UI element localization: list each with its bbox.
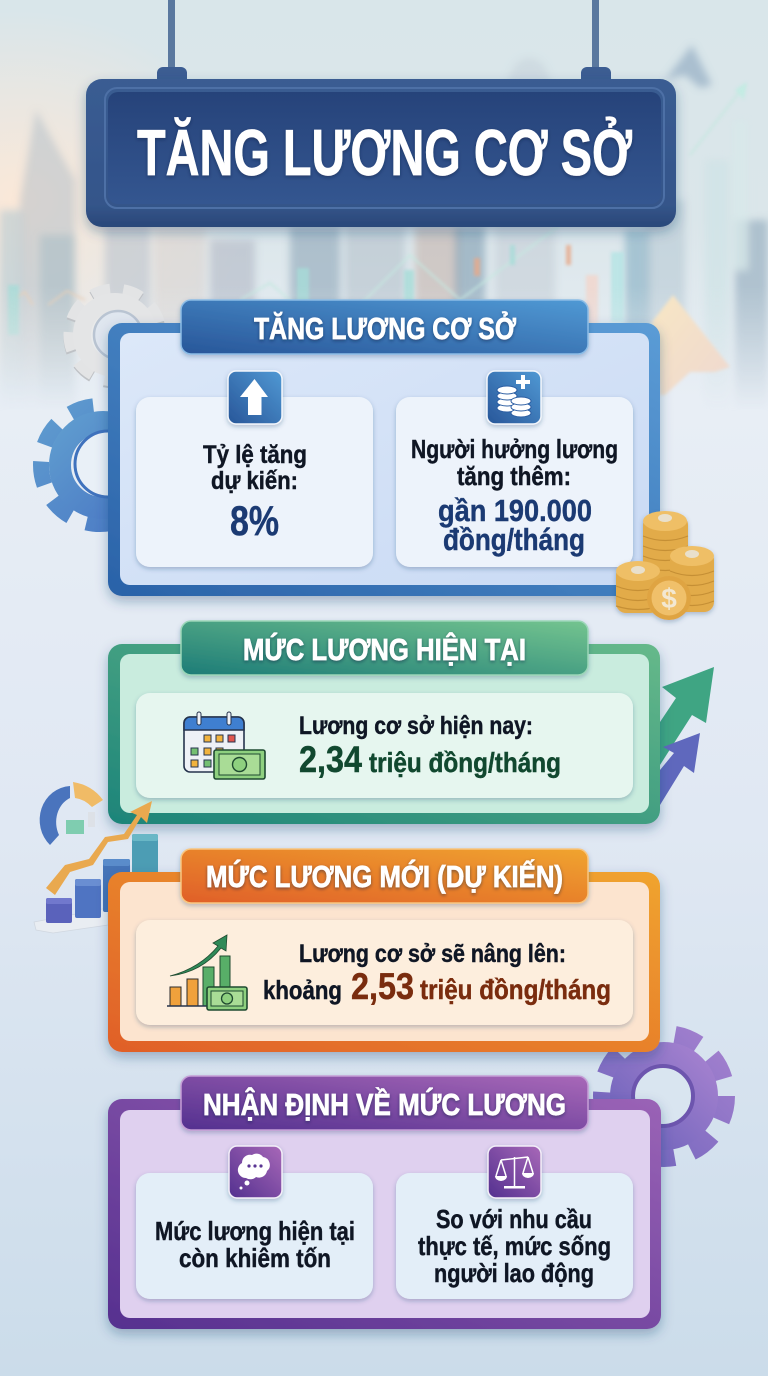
card: 2,34 — [299, 739, 362, 780]
card — [136, 693, 633, 798]
arrows: growth — [660, 667, 714, 805]
card: needs comparison: So với nhu cầu — [436, 1204, 592, 1234]
card: rate — [136, 397, 373, 567]
panel: assessment — [108, 1076, 661, 1329]
heading: MỨC LƯƠNG MỚI (DỰ KIẾN) — [206, 858, 563, 894]
heading: TĂNG LƯƠNG CƠ SỞ — [254, 310, 516, 346]
card: modest salary: Mức lương hiện tại — [155, 1216, 355, 1246]
card: Lương cơ sở hiện nay: — [299, 712, 533, 740]
heading — [181, 1076, 588, 1130]
card: rate: 8% — [230, 497, 279, 544]
gear: grey — [71, 291, 159, 381]
icon: scales — [488, 1146, 541, 1198]
icon: thought bubble — [229, 1146, 282, 1198]
card: triệu đồng/tháng — [420, 974, 611, 1005]
card: rate: Tỷ lệ tăng — [203, 441, 307, 469]
card: modest salary: còn khiêm tốn — [179, 1243, 331, 1273]
card: needs comparison: thực tế, mức sống — [418, 1231, 611, 1261]
card: modest salary — [136, 1173, 373, 1299]
card: triệu đồng/tháng — [369, 747, 561, 778]
icon: calendar and money — [184, 712, 265, 779]
card: 2,53 — [351, 966, 414, 1007]
card: Lương cơ sở sẽ nâng lên: — [299, 940, 566, 968]
heading: MỨC LƯƠNG HIỆN TẠI — [243, 631, 526, 667]
card: needs comparison — [396, 1173, 633, 1299]
icon: coin stacks — [616, 511, 714, 620]
card: added amount: Người hưởng lương — [411, 434, 618, 464]
gear: blue — [41, 406, 159, 524]
card: added amount: đồng/tháng — [443, 522, 585, 557]
card: added amount — [396, 397, 633, 567]
card — [136, 920, 633, 1025]
chart decoration — [34, 782, 158, 933]
icon: up arrow — [228, 371, 282, 424]
icon: coin stacks: $ — [661, 583, 677, 614]
card: needs comparison: người lao động — [434, 1258, 594, 1288]
sign — [86, 0, 676, 227]
card: rate: dự kiến: — [211, 467, 298, 495]
icon: growth chart and money — [167, 935, 247, 1010]
heading — [181, 300, 588, 354]
panel: new salary — [108, 849, 660, 1052]
panel: current salary — [108, 621, 660, 824]
card: added amount: tăng thêm: — [457, 461, 571, 491]
panel: increase — [108, 300, 660, 596]
card: khoảng — [263, 975, 342, 1005]
heading: NHẬN ĐỊNH VỀ MỨC LƯƠNG — [203, 1086, 566, 1122]
icon: coins plus — [487, 371, 541, 424]
card: added amount: gần 190.000 — [438, 493, 592, 528]
sign hanging rods — [157, 0, 611, 83]
heading — [181, 849, 588, 903]
gear: purple — [603, 1035, 725, 1157]
heading — [181, 621, 588, 675]
